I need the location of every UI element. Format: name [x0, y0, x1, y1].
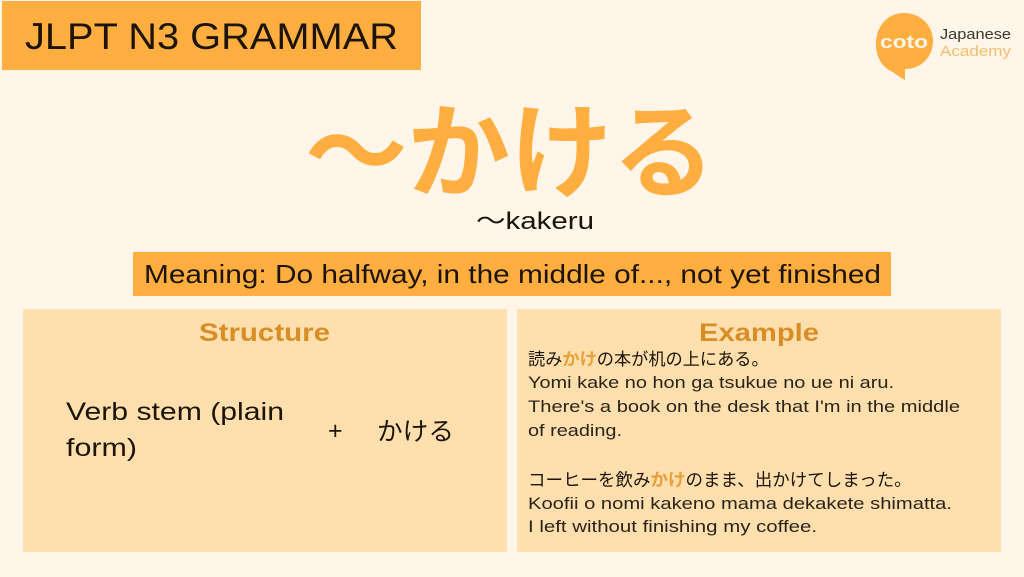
structure formula: Verb stem (plain	[66, 398, 284, 426]
structure formula: かける	[377, 412, 454, 448]
example sentence 2	[528, 467, 952, 536]
logo: Coto Japanese Academy	[876, 13, 1012, 80]
example sentence 2: I left without finishing my coffee.	[528, 517, 817, 536]
example sentence 1: Yomi kake no hon ga tsukue no ue ni aru.	[528, 373, 894, 392]
heading: structure: Structure	[199, 319, 330, 347]
structure formula: form)	[66, 434, 137, 462]
title: ~kakeru in Japanese: 〜かける	[305, 70, 715, 219]
example sentence 1: of reading.	[528, 421, 622, 440]
icon: speech bubble: coto	[880, 32, 928, 52]
structure formula	[66, 398, 454, 462]
header badge: JLPT N3 GRAMMAR	[25, 16, 398, 57]
example sentence 1	[528, 345, 960, 440]
example sentence 1: 読みかけの本が机の上にある。	[528, 345, 769, 370]
logo: Coto Japanese Academy: Academy	[940, 43, 1012, 60]
meaning banner: Meaning: Do halfway, in the middle of..., not yet finished	[144, 259, 881, 289]
logo: Coto Japanese Academy: Japanese	[940, 26, 1011, 43]
example sentence 2: コーヒーを飲みかけのまま、出かけてしまった。	[528, 467, 912, 492]
header badge	[2, 1, 421, 70]
structure formula: +	[328, 417, 343, 445]
heading: example: Example	[699, 319, 819, 347]
panel: example	[517, 309, 1001, 552]
panel: structure	[23, 309, 507, 552]
example sentence 2: Koofii o nomi kakeno mama dekakete shimatta.	[528, 494, 952, 513]
meaning banner	[133, 252, 891, 296]
example sentence 1: There's a book on the desk that I'm in the middle	[528, 397, 960, 416]
romaji subtitle: 〜kakeru	[476, 201, 594, 236]
